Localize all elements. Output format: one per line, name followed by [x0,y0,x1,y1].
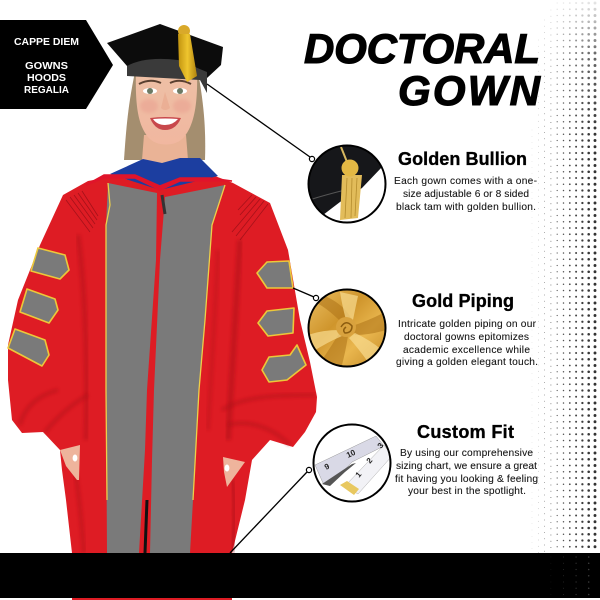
doctoral tam cap [107,24,223,93]
fingernails [73,454,229,472]
image circle: measuring tape: 9 [323,462,331,472]
text: gold piping: Gold Piping [412,291,514,311]
brand tag [0,20,113,109]
neck [142,135,188,172]
connector line to fit [230,467,312,553]
connector line to piping [293,288,319,301]
title: GOWN [398,67,542,114]
text: golden bullion [394,149,537,213]
gown body [8,176,317,600]
hair [124,72,205,160]
text: custom fit [395,422,538,497]
sleeve chevrons [8,248,306,382]
image circle: measuring tape: 2 [365,456,375,465]
brand tag: GOWNS [25,60,68,72]
gown velvet panels with gold piping [106,183,225,553]
text: gold piping: doctoral gowns epitomizes [404,332,529,343]
image circle: measuring tape: 3 [376,441,386,450]
text: gold piping: Intricate golden piping on our [398,319,537,330]
halftone dot background [532,3,595,553]
image circle: gold piping satin [308,288,386,368]
academic hood collar [86,158,232,190]
text: gold piping [396,291,538,368]
text: gold piping: academic excellence while [403,345,530,356]
image circle: golden bullion [308,144,386,224]
brand tag: CAPPE DIEM [14,36,79,48]
title [304,25,542,114]
text: custom fit: your best in the spotlight. [408,486,526,497]
text: custom fit: fit having you looking & feeling [395,474,538,485]
figure: graduate wearing doctoral gown [8,24,317,600]
image circle: measuring tape [312,424,392,502]
text: golden bullion: black tam with golden bullion. [396,202,536,213]
face [136,70,197,144]
hands [60,445,245,487]
text: custom fit: By using our comprehensive [400,448,533,459]
connector line to bullion [207,84,315,162]
text: golden bullion: Each gown comes with a one- [394,176,537,187]
bottom black bar [0,553,600,598]
title: DOCTORAL [304,25,540,72]
shoulder pleats [66,191,268,240]
text: custom fit: Custom Fit [417,422,514,442]
brand tag: REGALIA [24,84,69,96]
text: golden bullion: Golden Bullion [398,149,527,169]
gown shading folds [20,235,315,553]
text: gold piping: giving a golden elegant touch. [396,357,538,368]
brand tag: HOODS [27,72,66,84]
text: golden bullion: size adjustable 6 or 8 sided [403,189,529,200]
image circle: measuring tape: 10 [345,448,357,460]
text: custom fit: sizing chart, we ensure a great [396,461,537,472]
image circle: measuring tape: 1 [354,470,364,479]
